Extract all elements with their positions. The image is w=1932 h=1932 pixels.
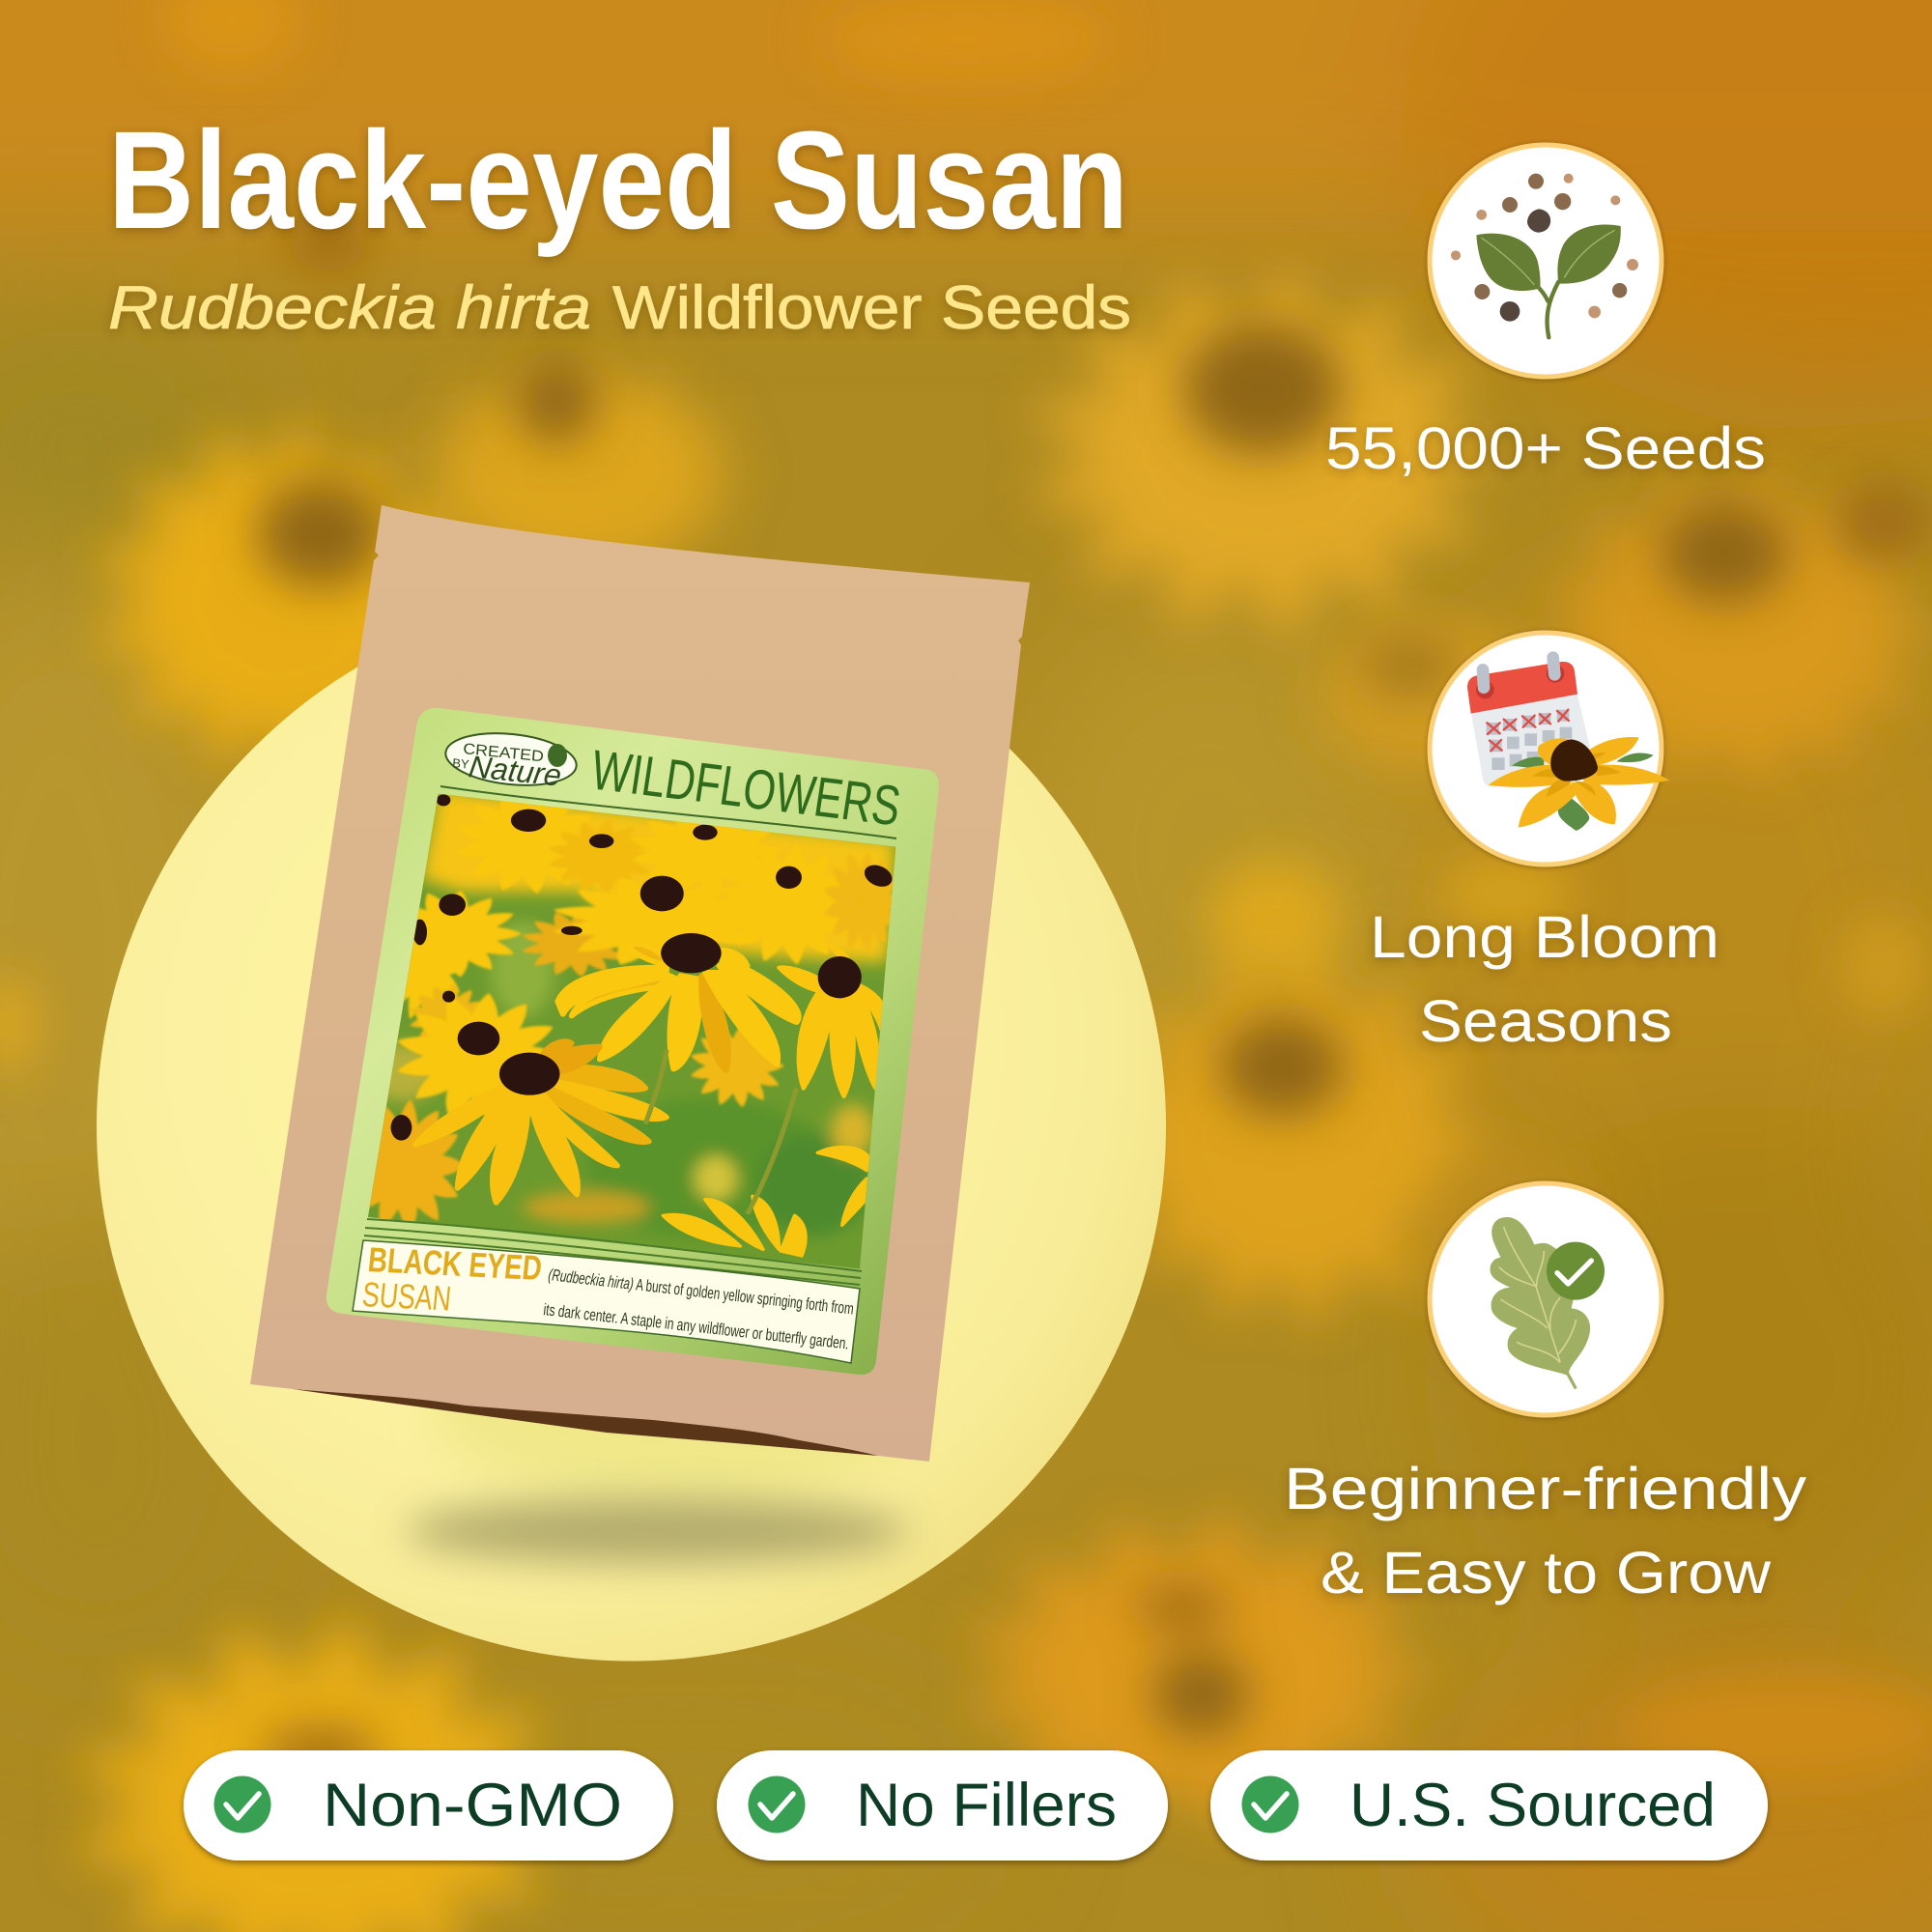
badge text: Non-GMO — [323, 1772, 622, 1839]
brand logo: Nature — [467, 749, 564, 793]
lower daisy petals — [663, 1148, 870, 1256]
label: Beginner-friendly & Easy to Grow: Beginner-friendly — [1284, 1456, 1807, 1521]
decorative lines — [364, 1219, 862, 1285]
badge: Non-GMO — [184, 1750, 673, 1861]
subtitle: Wildflower Seeds — [612, 274, 1131, 342]
main daisy right — [779, 945, 883, 1096]
kraft paper pouch — [250, 505, 1030, 1462]
feature: seeds — [1325, 145, 1766, 481]
brand logo: BY — [452, 755, 470, 772]
icon: calendar and flower — [1430, 633, 1669, 865]
brand logo: CREATED — [463, 741, 544, 765]
badge: No Fillers — [717, 1750, 1168, 1861]
main daisy front — [415, 1041, 667, 1203]
description strip — [353, 1240, 860, 1363]
description text line 1: (Rudbeckia hirta) A burst of golden yellow springing forth from — [548, 1265, 855, 1319]
icon: check — [1242, 1776, 1298, 1833]
pale yellow circle behind the packet — [97, 591, 1166, 1662]
label: Beginner-friendly & Easy to Grow: & Easy to Grow — [1321, 1540, 1772, 1605]
badge: U.S. Sourced — [1210, 1750, 1768, 1861]
badge text: No Fillers — [856, 1772, 1117, 1839]
flower stems — [645, 1050, 796, 1214]
icon: seeds and sprout — [1430, 145, 1662, 377]
icon: oak leaf with check — [1430, 1183, 1662, 1415]
title: Black-eyed Susan — [108, 102, 1128, 258]
icon: check — [214, 1776, 270, 1833]
seed packet — [250, 505, 1030, 1462]
label: 55,000+ Seeds: 55,000+ Seeds — [1325, 415, 1766, 481]
label: Long Bloom Seasons: Seasons — [1419, 988, 1672, 1054]
product name: BLACK EYED — [366, 1239, 544, 1288]
packet bottom gusset — [293, 1389, 878, 1456]
flower photograph — [340, 782, 920, 1285]
brand logo — [443, 727, 579, 793]
icon: check — [748, 1776, 806, 1833]
badge text: U.S. Sourced — [1350, 1772, 1716, 1839]
label: Long Bloom Seasons — [1370, 904, 1719, 1054]
label: Beginner-friendly & Easy to Grow — [1284, 1456, 1807, 1605]
feature: long bloom — [1370, 633, 1719, 1054]
label: Long Bloom Seasons: Long Bloom — [1370, 904, 1719, 970]
green product label — [327, 708, 939, 1375]
subtitle: Rudbeckia hirta — [108, 274, 591, 342]
flower centres — [391, 794, 896, 1141]
main daisy centre — [557, 944, 799, 1070]
brand heading: WILDFLOWERS — [587, 739, 904, 838]
green product label: SUSAN — [360, 1274, 453, 1319]
subtitle — [108, 274, 1131, 342]
description text line 2: its dark center. A staple in any wildflower or butterfly garden. — [543, 1300, 850, 1353]
feature: beginner friendly — [1284, 1183, 1807, 1605]
